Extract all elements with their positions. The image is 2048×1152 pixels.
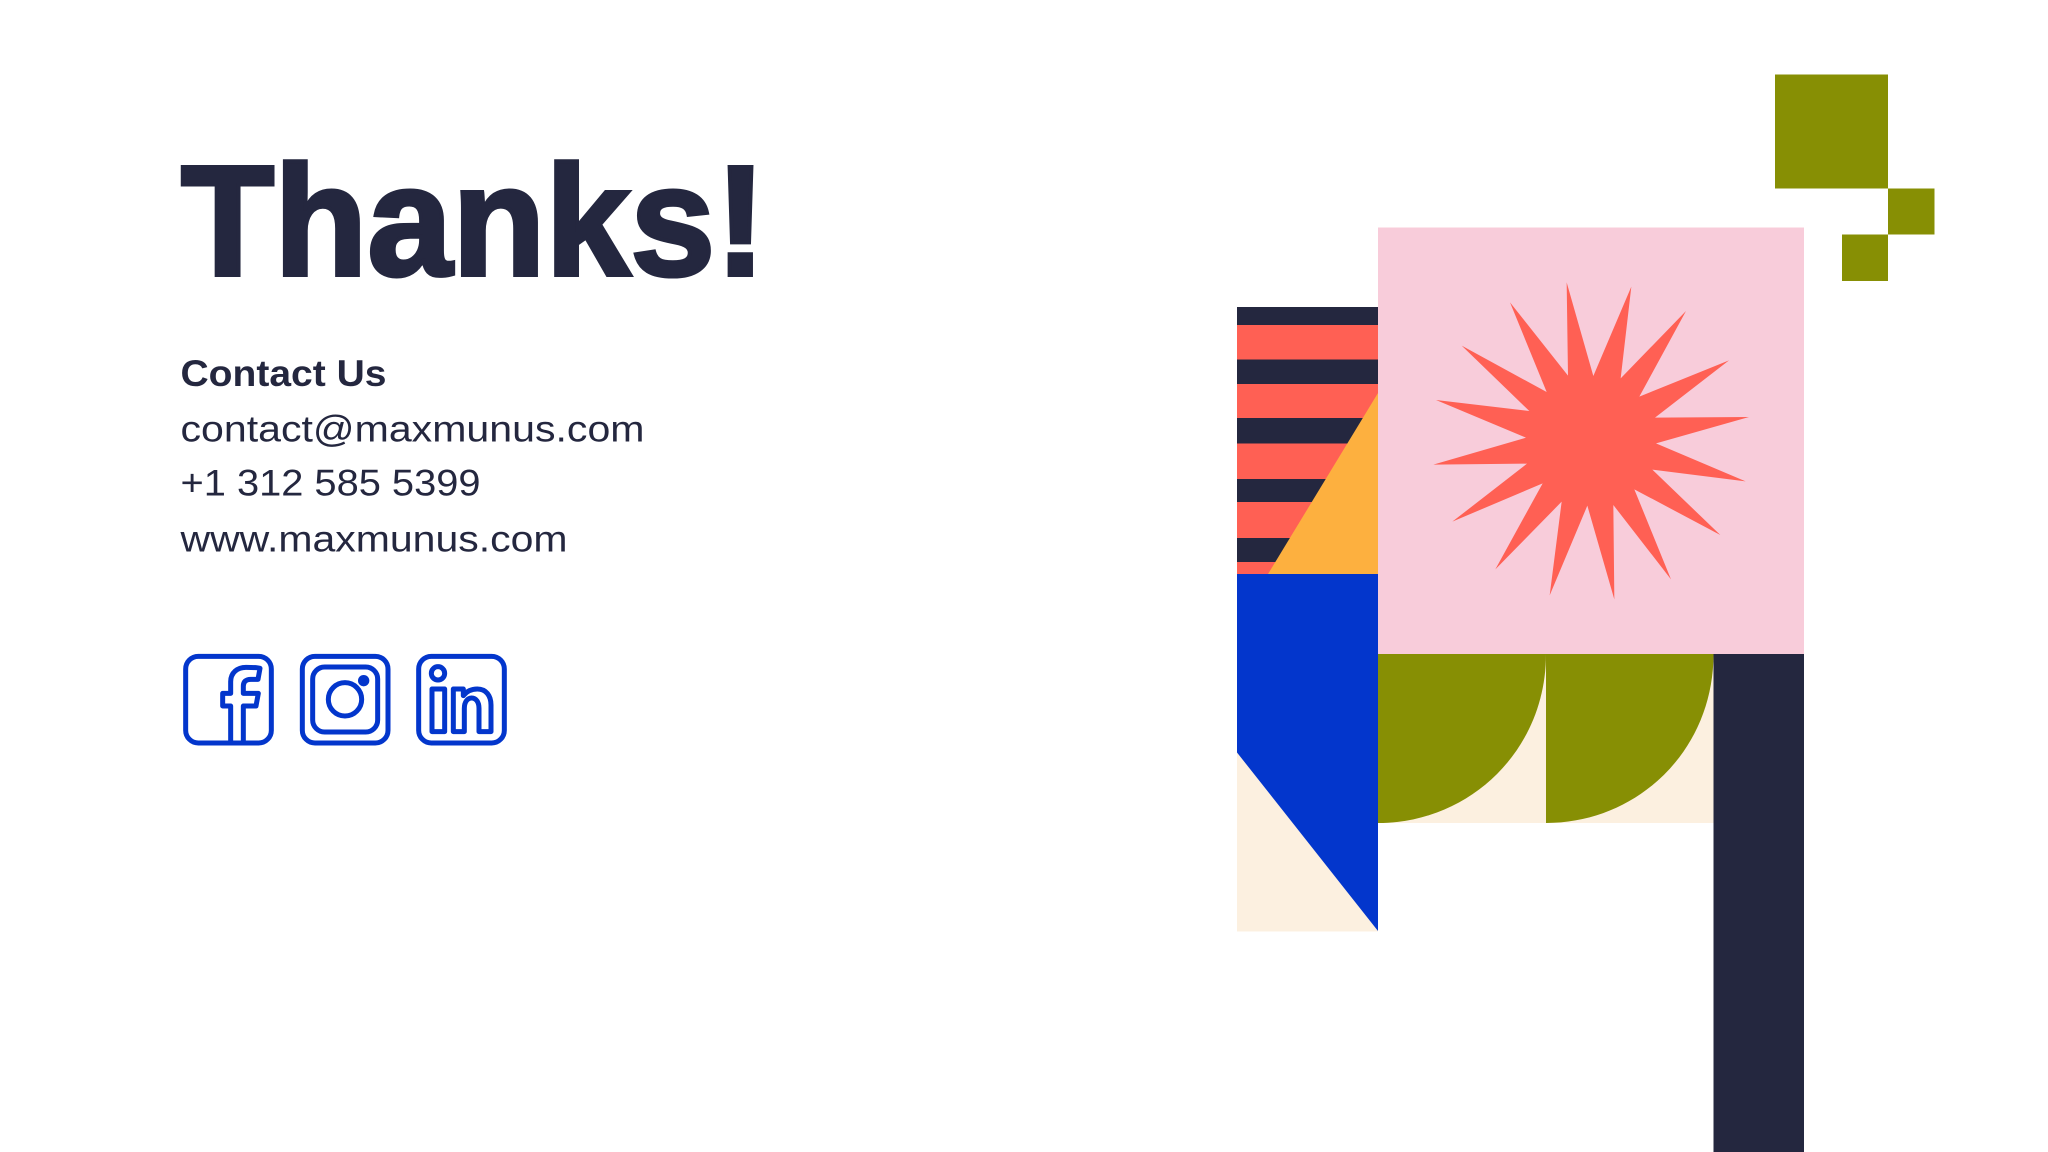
cream backing for olive shapes (1378, 654, 1714, 823)
contact heading: Contact Us (180, 353, 386, 394)
coral starburst (1433, 282, 1749, 599)
pink panel (1378, 228, 1804, 654)
social icons (186, 656, 504, 743)
phone: +1 312 585 5399 (180, 462, 481, 504)
icon: instagram (302, 656, 388, 743)
icon: linkedin (419, 656, 504, 743)
website: www.maxmunus.com (179, 518, 567, 560)
cream triangle backing (1237, 752, 1378, 932)
icon: facebook (186, 656, 271, 743)
yellow triangle (1268, 393, 1378, 574)
contact details block (179, 353, 644, 560)
olive quarter circles (1378, 654, 1714, 823)
email: contact@maxmunus.com (180, 408, 644, 450)
striped panel (1237, 307, 1378, 574)
olive pixel squares (1775, 74, 1934, 281)
blue panel (1237, 574, 1378, 931)
navy column (1714, 654, 1804, 1152)
title: Thanks! (181, 134, 766, 309)
geometric artwork (1237, 74, 1934, 1152)
